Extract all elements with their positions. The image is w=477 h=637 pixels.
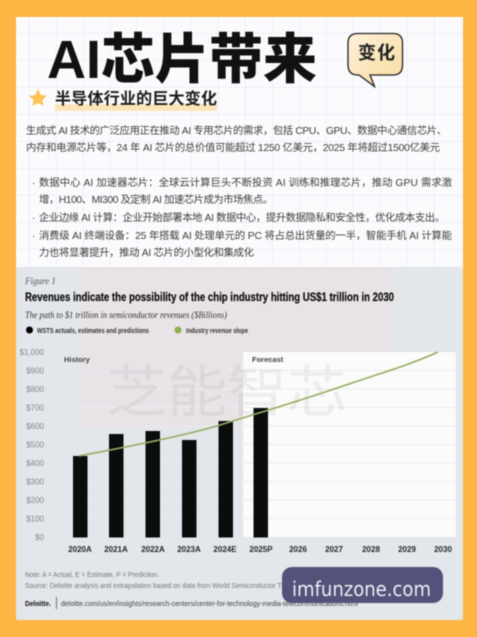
x axis labels: 2026 (289, 545, 307, 554)
region labels (64, 355, 284, 364)
callout: speech bubble 变化 (348, 34, 402, 86)
footer: Deloitte credit and url: Deloitte. (25, 599, 51, 608)
x axis labels: 2021A (104, 545, 128, 554)
bars (73, 408, 268, 538)
x axis labels (68, 545, 452, 554)
text block: intro paragraph (26, 124, 447, 154)
y axis labels: $1,000 (20, 348, 45, 357)
x axis labels: 2020A (68, 545, 92, 554)
y axis labels: $0 (35, 533, 45, 542)
watermark text: 芝能智芯 (107, 361, 347, 424)
text block: bullet list: · (32, 231, 35, 242)
y axis labels: $100 (26, 514, 45, 524)
heading: chart title: Revenues indicate the possibility of the chip industry hitting US$1 trillion in 2030 (25, 292, 394, 304)
icon: star (29, 89, 47, 106)
y axis labels: $600 (26, 422, 45, 431)
y axis labels: $800 (26, 385, 45, 394)
panel: chart figure background (16, 267, 463, 620)
legend: WSTS actuals, estimates and predictions (37, 326, 149, 335)
region labels: Forecast (252, 355, 284, 364)
industry revenue slope line (79, 352, 438, 456)
text: chart subtitle: The path to $1 trillion in semiconductor revenues ($Billions) (25, 310, 227, 321)
y axis labels: $500 (26, 440, 45, 450)
text block: bullet list: 力也将显著提升，推动 AI 芯片的小型化和集成化 (39, 246, 254, 259)
y axis labels: $300 (26, 478, 45, 486)
x axis labels: 2030 (434, 545, 452, 554)
footer: Deloitte credit and url (25, 597, 358, 609)
x axis labels: 2022A (141, 545, 165, 554)
text block: bullet list (32, 176, 452, 259)
text: notes and source (25, 570, 325, 590)
region labels: History (64, 355, 91, 364)
y axis labels (20, 348, 45, 542)
text block: bullet list: 增，H100、MI300 及定制 AI 加速芯片成为市场焦点。 (39, 193, 273, 206)
text: notes and source: Source: Deloitte analysis and extrapolation based on data from World Semiconductor Trade Statistics. (25, 581, 325, 590)
y axis labels: $900 (26, 366, 45, 376)
legend: Industry revenue slope (186, 326, 248, 335)
x axis labels: 2025P (249, 545, 273, 554)
text block: bullet list: · (32, 178, 35, 189)
text block: bullet list: 企业边缘 AI 计算：企业开始部署本地 AI 数据中心，提升数据隐私和安全性，优化成本支出。 (39, 211, 445, 224)
x axis labels: 2029 (398, 545, 416, 554)
title: AI芯片带来 (47, 30, 317, 90)
legend (26, 326, 248, 335)
text block: intro paragraph: 生成式 AI 技术的广泛应用正在推动 AI 专用芯片的需求，包括 CPU、GPU、数据中心通信芯片、 (26, 124, 447, 137)
footer: Deloitte credit and url: deloitte.com/us/en/insights/research-centers/center-for-technology-media-telecommunications.html (61, 599, 358, 608)
callout: speech bubble 变化: 变化 (358, 42, 395, 63)
text block: intro paragraph: 内存和电源芯片等，24 年 AI 芯片的总价值可能超过 1250 亿美元，2025 年将超过1500亿美元 (26, 141, 440, 154)
watermark: faint pink tint (80, 267, 396, 427)
text: figure label: Figure 1 (24, 276, 56, 286)
panel: grid paper card (16, 17, 463, 269)
watermark badge: imfunzone.com (282, 567, 443, 603)
subtitle with highlight: 半导体行业的巨大变化 (55, 89, 217, 108)
chart: revenue bars with forecast area (20, 348, 456, 554)
x axis labels: 2024E (213, 545, 237, 554)
text block: bullet list: 消费级 AI 终端设备：25 年搭载 AI 处理单元的 PC 将占总出货量的一半，智能手机 AI 计算能 (39, 229, 452, 242)
x axis labels: 2028 (362, 545, 380, 554)
forecast panel (243, 352, 456, 537)
text block: bullet list: 数据中心 AI 加速器芯片：全球云计算巨头不断投资 AI 训练和推理芯片，推动 GPU 需求激 (39, 176, 452, 189)
watermark badge: imfunzone.com: imfunzone.com (292, 577, 431, 601)
y axis labels: $700 (26, 404, 45, 412)
text block: bullet list: · (32, 213, 35, 224)
x axis labels: 2023A (177, 545, 201, 554)
x axis labels: 2027 (325, 545, 343, 554)
text: notes and source: Note: A = Actual, E = Estimate, P = Prediction. (25, 570, 159, 579)
y axis labels: $400 (26, 459, 45, 468)
y axis labels: $200 (26, 496, 45, 505)
